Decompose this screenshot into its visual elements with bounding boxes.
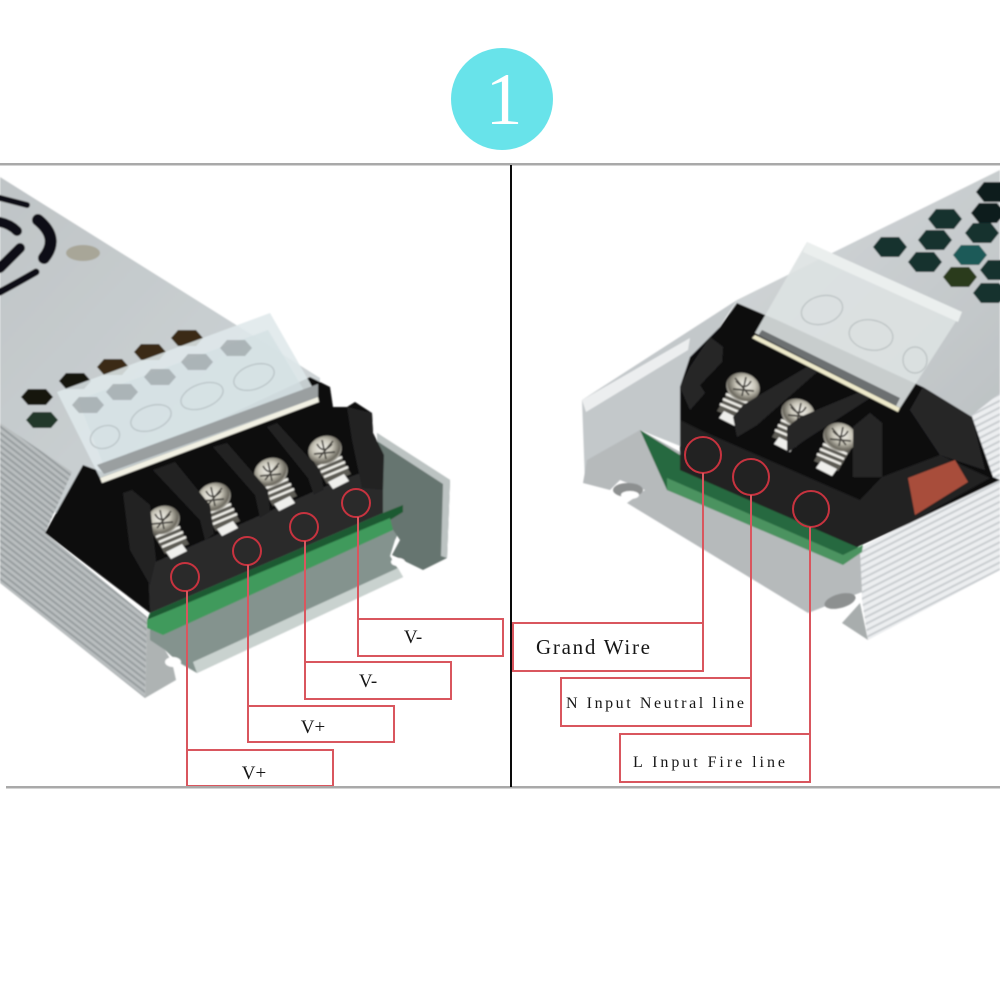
left foot of right unit notch xyxy=(613,483,643,497)
label V+ inner: V+ xyxy=(301,717,325,738)
center divider xyxy=(510,165,512,787)
callout circle live xyxy=(793,491,829,527)
label N Input Neutral line: N Input Neutral line xyxy=(566,695,744,712)
frame top rule xyxy=(0,163,1000,166)
callout circle V- outer xyxy=(342,489,370,517)
left ribbed side wall xyxy=(0,423,147,698)
right labels xyxy=(536,635,785,771)
right white notch xyxy=(621,491,639,499)
leader and box Grand Wire xyxy=(513,473,703,671)
callout circle ground xyxy=(685,437,721,473)
left notch white xyxy=(391,558,405,566)
right clear cover xyxy=(752,242,962,412)
left green circuit board xyxy=(147,505,403,635)
right terminal block xyxy=(680,303,1000,547)
callout circle V+ outer xyxy=(171,563,199,591)
right upper ribs xyxy=(972,393,1000,480)
badge circle xyxy=(451,48,553,150)
right end plate highlight xyxy=(582,338,690,412)
fan vent slots xyxy=(0,198,51,292)
label V- inner: V- xyxy=(359,671,377,692)
right base plate xyxy=(583,430,862,613)
right green circuit board xyxy=(640,430,863,565)
left housing top plate xyxy=(0,177,320,520)
badge numeral: 1 xyxy=(486,59,522,141)
callout circle V- inner xyxy=(290,513,318,541)
label L Input Fire line: L Input Fire line xyxy=(633,754,785,771)
number badge xyxy=(451,48,553,150)
leader and box V+ inner xyxy=(248,565,394,742)
left terminal screws xyxy=(142,431,351,559)
leader and box neutral xyxy=(561,495,751,726)
left base plate bright edge xyxy=(193,568,403,673)
right foot notch xyxy=(823,590,857,612)
right foot xyxy=(842,603,868,640)
callout circle neutral xyxy=(733,459,769,495)
left foot notch xyxy=(165,657,181,667)
left terminal block xyxy=(45,377,383,613)
right ribbed side wall xyxy=(860,472,1000,640)
leader and box V- outer xyxy=(358,517,503,656)
label Grand Wire: Grand Wire xyxy=(536,635,650,659)
left labels xyxy=(242,627,422,784)
left far wall xyxy=(377,433,450,570)
left callouts xyxy=(171,489,503,786)
right callouts xyxy=(513,437,829,782)
right terminal screws xyxy=(717,368,861,476)
left terminal dividers xyxy=(123,407,384,585)
leader and box live xyxy=(620,527,810,782)
right housing top plate xyxy=(720,170,1000,440)
left vent holes xyxy=(21,330,203,428)
frame bottom rule xyxy=(6,786,1000,788)
label V- outer: V- xyxy=(404,627,422,648)
right end plate xyxy=(582,300,737,482)
left base plate xyxy=(150,515,405,673)
right red capacitor xyxy=(908,460,968,515)
left product photo: output terminals xyxy=(0,177,450,698)
leader and box V+ outer xyxy=(187,591,333,786)
label V+ outer: V+ xyxy=(242,763,266,784)
left end profile and foot xyxy=(145,617,176,698)
right terminal dividers xyxy=(680,337,985,477)
left far wall edge xyxy=(377,433,450,558)
leader and box V- inner xyxy=(305,541,451,699)
callout circle V+ inner xyxy=(233,537,261,565)
right product photo: input terminals xyxy=(582,170,1000,640)
left clear cover xyxy=(57,313,319,483)
housing screw xyxy=(66,245,100,261)
right terminal front face xyxy=(680,420,990,547)
right vent holes xyxy=(873,182,1000,303)
left terminal front face xyxy=(148,465,383,613)
